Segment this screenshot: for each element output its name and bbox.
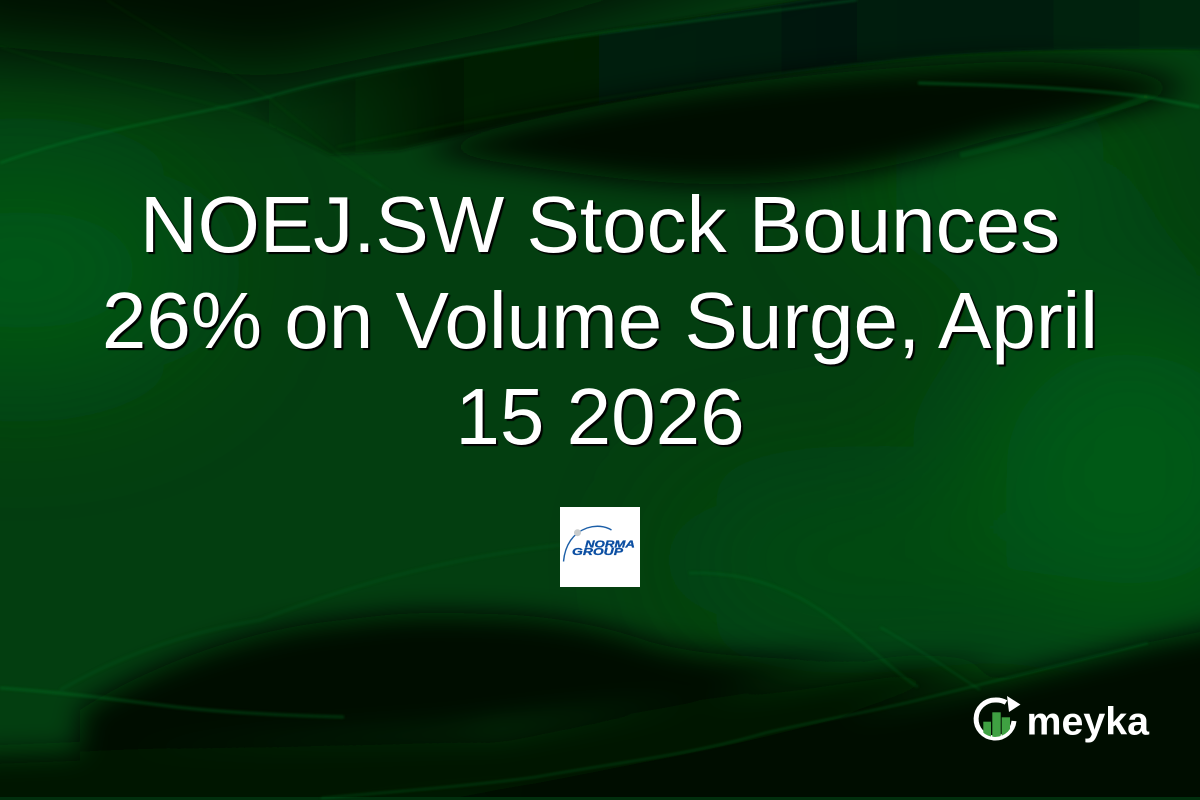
bottom dark regions bbox=[0, 613, 1200, 800]
title: NOEJ.SW Stock Bounces bbox=[140, 180, 1060, 269]
title bbox=[102, 180, 1098, 461]
logo arc bbox=[564, 526, 612, 562]
brand: meyka logo bbox=[974, 696, 1150, 744]
wordmark: meyka bbox=[1026, 700, 1149, 744]
title: 26% on Volume Surge, April bbox=[102, 276, 1098, 365]
title: 15 2026 bbox=[455, 372, 745, 461]
logo ball bbox=[574, 529, 581, 536]
dark band along top bbox=[230, 0, 1200, 155]
dark lens top bbox=[420, 62, 1190, 184]
soft glows bbox=[0, 130, 1200, 640]
icon: circular arrow with bars bbox=[976, 696, 1020, 739]
logo wordmark GROUP: GROUP bbox=[572, 546, 624, 558]
logo wordmark NORMA: NORMA bbox=[585, 538, 635, 550]
company logo: Norma Group bbox=[560, 507, 640, 587]
top left fade bbox=[0, 0, 900, 80]
